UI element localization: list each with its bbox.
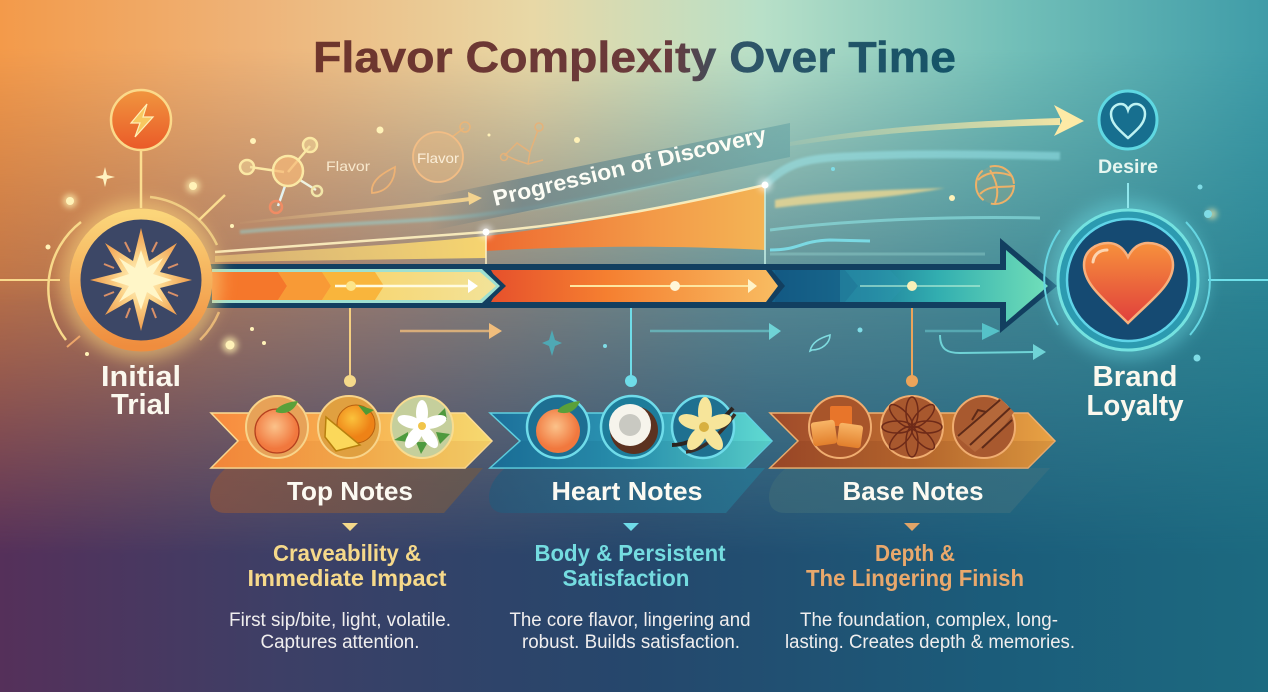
subheading: base notes: [806, 540, 1024, 591]
panel: heart notes: [489, 396, 772, 653]
segment: third, teal arrowhead: [770, 250, 1048, 322]
icon: peach: [527, 396, 589, 458]
progression swooshes and rising wedge: [215, 154, 1060, 264]
description: top notes: [229, 610, 451, 653]
segment: first, yellow: [212, 268, 506, 304]
label plate: heart notes: [489, 468, 765, 513]
description: heart notes: robust. Builds satisfaction.: [522, 632, 740, 653]
node: brand loyalty heart: [1044, 183, 1210, 360]
label: initial trial: Trial: [111, 389, 171, 421]
description: top notes: Captures attention.: [260, 632, 420, 653]
label plate: top notes: [210, 468, 483, 513]
panel: top notes: [210, 396, 492, 653]
icon: star anise: [881, 396, 943, 458]
label: flavor: Flavor: [326, 158, 370, 174]
description: heart notes: [510, 610, 750, 653]
ribbon: base notes: [770, 413, 1055, 468]
description: base notes: [785, 610, 1075, 653]
banner: progression of discovery: [430, 121, 790, 231]
heading: base notes: Base Notes: [842, 476, 984, 506]
label plate: base notes: [769, 468, 1050, 513]
heading: top notes: Top Notes: [287, 476, 413, 506]
connector lines to note ribbons: [344, 308, 918, 387]
description: top notes: First sip/bite, light, volatile.: [229, 610, 451, 631]
pointer: top notes: [342, 523, 358, 531]
subheading: top notes: [248, 540, 447, 591]
description: base notes: The foundation, complex, long-: [800, 610, 1058, 631]
subheading: top notes: Immediate Impact: [248, 565, 447, 591]
subheading: heart notes: Body & Persistent: [534, 540, 726, 566]
molecule: right: [500, 123, 543, 164]
ribbon: heart notes: [490, 413, 772, 468]
description: heart notes: The core flavor, lingering and: [510, 610, 750, 631]
icon: orange slice: [318, 396, 380, 458]
icon: caramel cubes: [809, 396, 871, 458]
pointer: base notes: [904, 523, 920, 531]
heading: heart notes: Heart Notes: [552, 476, 702, 506]
segment: second, orange: [487, 268, 785, 304]
lower small arrows: [400, 323, 1046, 360]
label: brand loyalty: Brand: [1092, 361, 1178, 393]
icon: wood bark: [953, 396, 1015, 458]
sparkles: [46, 126, 1217, 362]
ribbon: top notes: [211, 413, 492, 468]
bubble: flavor: Flavor: [417, 150, 459, 166]
subheading: heart notes: Satisfaction: [562, 565, 690, 591]
label: brand loyalty: Loyalty: [1086, 390, 1184, 422]
main timeline arrow: [205, 238, 1057, 333]
icon: vanilla: [672, 396, 735, 458]
icon: desire heart badge: [1099, 91, 1157, 149]
molecule: left: [240, 138, 322, 213]
arrow: top swoosh to desire: [790, 105, 1084, 146]
label: initial trial: [101, 361, 181, 421]
subheading: base notes: Depth &: [875, 540, 955, 566]
subheading: top notes: Craveability &: [273, 540, 421, 566]
title: Flavor Complexity Over Time: [313, 33, 956, 82]
label: brand loyalty: [1086, 361, 1184, 422]
banner: progression of discovery: Progression of Discovery: [490, 121, 769, 211]
label: initial trial: Initial: [101, 361, 181, 393]
label: desire: Desire: [1098, 157, 1158, 178]
pointer: heart notes: [623, 523, 639, 531]
icon: white blossom: [391, 396, 453, 458]
bubble: flavor: [413, 122, 470, 182]
icon: leaf globe: [976, 166, 1014, 204]
icon: almond leaf: [372, 167, 395, 193]
arrow: cream rising arrow: [240, 192, 482, 224]
panel: base notes: [769, 396, 1075, 653]
icon: peach: [246, 396, 308, 458]
icon: lightning badge: [111, 90, 171, 208]
description: base notes: lasting. Creates depth & memories.: [785, 632, 1075, 653]
subheading: heart notes: [534, 540, 726, 591]
icon: coconut: [601, 396, 663, 458]
node: initial trial burst: [48, 195, 225, 360]
subheading: base notes: The Lingering Finish: [806, 565, 1024, 591]
